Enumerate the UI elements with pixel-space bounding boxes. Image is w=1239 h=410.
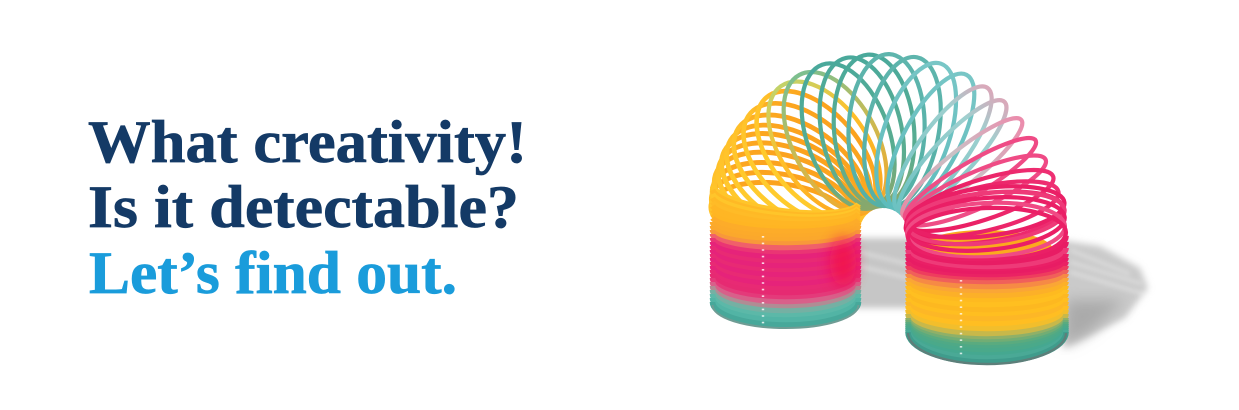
slinky spring (702, 50, 1067, 364)
heading line 2: Is it detectable? (88, 174, 519, 240)
right stack highlight (960, 280, 962, 356)
cast shadow of the spring (855, 238, 1148, 348)
left stack coil rows (712, 186, 858, 328)
right stack interior (917, 230, 1053, 270)
arch coils (702, 50, 1066, 263)
right stack coil rows (908, 236, 1066, 364)
heading line 3: Let’s find out. (89, 240, 457, 306)
left stack red glow (830, 238, 856, 286)
heading line 1: What creativity! (88, 109, 527, 175)
heading (88, 109, 527, 306)
right stack top rings (905, 179, 1067, 265)
left stack highlight (762, 236, 764, 326)
